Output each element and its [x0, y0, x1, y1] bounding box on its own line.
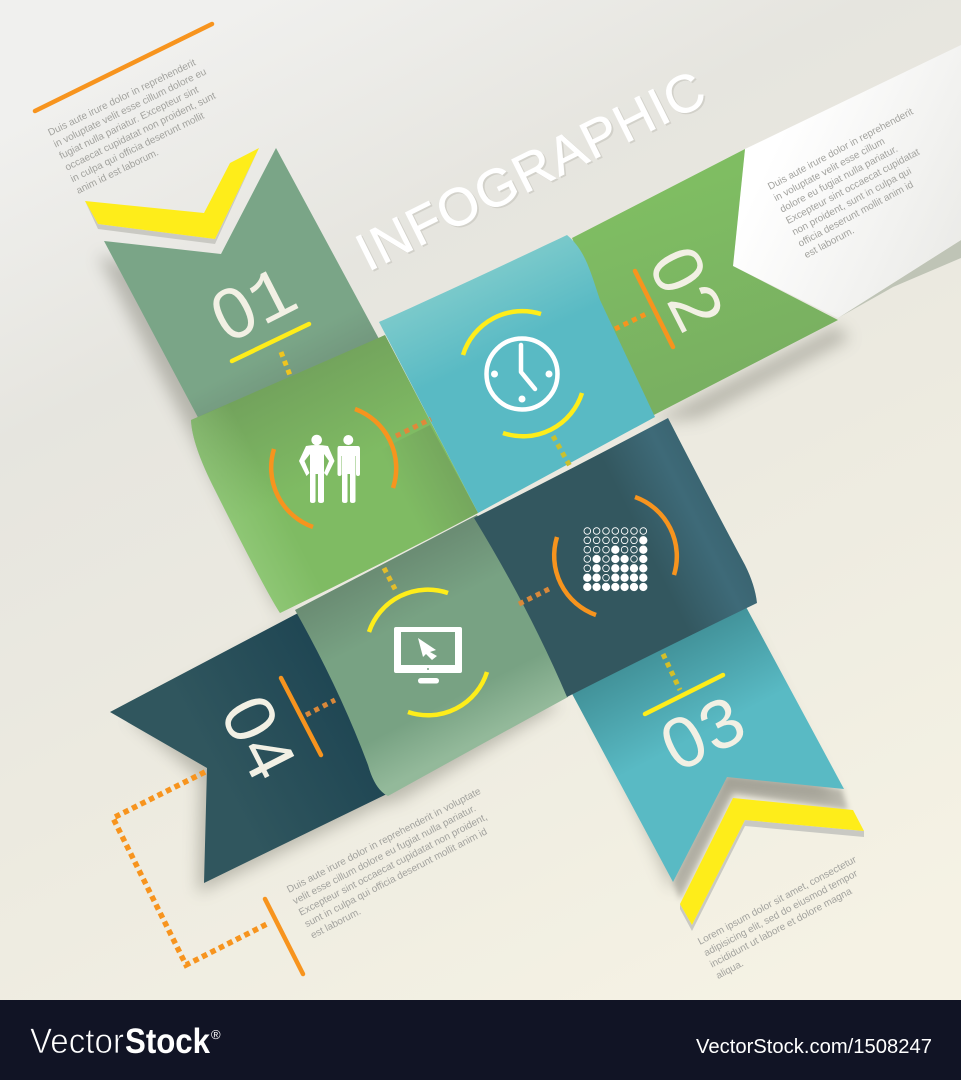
- text block: top left: in culpa qui officia deserunt mollit: [69, 111, 206, 185]
- text block: bottom right: adipisicing elit, sed do eiusmod tempor: [702, 868, 860, 959]
- panel: sash dark (dot grid): [474, 418, 757, 697]
- text block: top left: anim id est laborum.: [75, 147, 161, 197]
- text block: on white paper: Excepteur sint occaecat cupidatat: [784, 147, 922, 227]
- ribbon 01: [104, 148, 385, 440]
- text block: top left: Duis aute irure dolor in reprehenderit: [46, 57, 198, 139]
- ribbon 02: [572, 149, 838, 417]
- ribbon 04: [110, 612, 395, 883]
- arcs dark: [554, 497, 677, 615]
- text block: bottom right: Lorem ipsum dolor sit amet, consectetur: [696, 854, 859, 948]
- text block: bottom centre: sunt in culpa qui officia deserunt mollit anim id: [303, 826, 489, 930]
- connector sage: [384, 568, 396, 591]
- dotted connector: bottom left bracket: [113, 772, 267, 965]
- text block: on white paper: Duis aute irure dolor in reprehenderit: [766, 106, 915, 193]
- text block: bottom centre: est laborum.: [309, 906, 363, 941]
- rule 03: [645, 675, 723, 714]
- text block: on white paper: [766, 106, 952, 261]
- text block: bottom centre: velit esse cillum dolore eu fugiat nulla pariatur.: [291, 803, 478, 907]
- arcs teal: [463, 311, 582, 436]
- icon: two people: [299, 435, 360, 503]
- text block: bottom right: aliqua.: [714, 958, 746, 982]
- title: INFOGRAPHIC: [349, 61, 716, 284]
- shadow under ribbon 03 notch: [673, 777, 848, 900]
- underline 01: [232, 324, 309, 361]
- arcs green: [271, 409, 396, 527]
- text block: bottom right: [696, 854, 877, 982]
- text block: bottom centre: Duis aute irure dolor in reprehenderit in voluptate: [285, 786, 483, 896]
- text block: top left: [46, 55, 231, 197]
- text block: top left: fugiat nulla pariatur. Excepteur sint: [58, 85, 201, 162]
- text block: top left: occaecat cupidatat non proident, sunt: [63, 91, 218, 173]
- orange rule, bottom left: [265, 899, 303, 974]
- connector 01: [281, 352, 293, 383]
- text block: on white paper: non proident, sunt in culpa qui: [790, 166, 913, 238]
- chevron: top yellow: [85, 148, 259, 244]
- text block: bottom centre: [285, 786, 507, 941]
- text block: on white paper: est laborum.: [803, 225, 856, 261]
- text block: on white paper: in voluptate velit esse cillum: [772, 136, 887, 204]
- rule 04: [281, 678, 321, 755]
- panel: sash sage (monitor): [295, 515, 568, 796]
- number 02: 02: [627, 234, 742, 347]
- text block: bottom centre: Excepteur sint occaecat cupidatat non proident,: [297, 812, 489, 919]
- icon: dot matrix: [584, 528, 647, 591]
- connector 02: [615, 313, 648, 329]
- connector teal: [553, 436, 571, 468]
- chevron: bottom yellow: [680, 798, 864, 931]
- ribbon drop shadows: [98, 255, 850, 893]
- text block: on white paper: dolore eu fugiat nulla pariatur.: [778, 144, 900, 215]
- orange rule, top left: [35, 24, 212, 111]
- icon: monitor: [394, 627, 462, 684]
- connector 03: [663, 654, 680, 690]
- footer logo: Vector: [30, 1022, 124, 1061]
- text block: bottom right: incididunt ut labore et dolore magna: [708, 886, 854, 970]
- panel: white paper strip behind ribbon 02: [733, 45, 961, 318]
- panel: sash green (people): [191, 335, 478, 613]
- number 03: 03: [648, 678, 761, 793]
- arcs sage: [369, 590, 487, 715]
- connector dark: [519, 587, 553, 604]
- icon: clock: [486, 338, 558, 410]
- panel: sash teal (clock): [379, 235, 655, 513]
- footer bar: [0, 1000, 961, 1080]
- footer logo: Stock: [125, 1022, 210, 1061]
- ribbon 03: [570, 605, 844, 882]
- connector 04: [306, 700, 335, 715]
- text block: on white paper: officia deserunt mollit anim id: [797, 179, 915, 250]
- rule 02: [635, 271, 673, 347]
- title: INFOGRAPHIC: [347, 60, 714, 283]
- number 01: 01: [198, 249, 311, 364]
- footer url: VectorStock.com/1508247: [696, 1036, 932, 1058]
- footer logo: ®: [211, 1027, 221, 1042]
- footer logo: [30, 1022, 221, 1061]
- connector green: [396, 419, 431, 436]
- number 04: 04: [199, 683, 314, 796]
- text block: top left: in voluptate velit esse cillum dolore eu: [52, 67, 208, 150]
